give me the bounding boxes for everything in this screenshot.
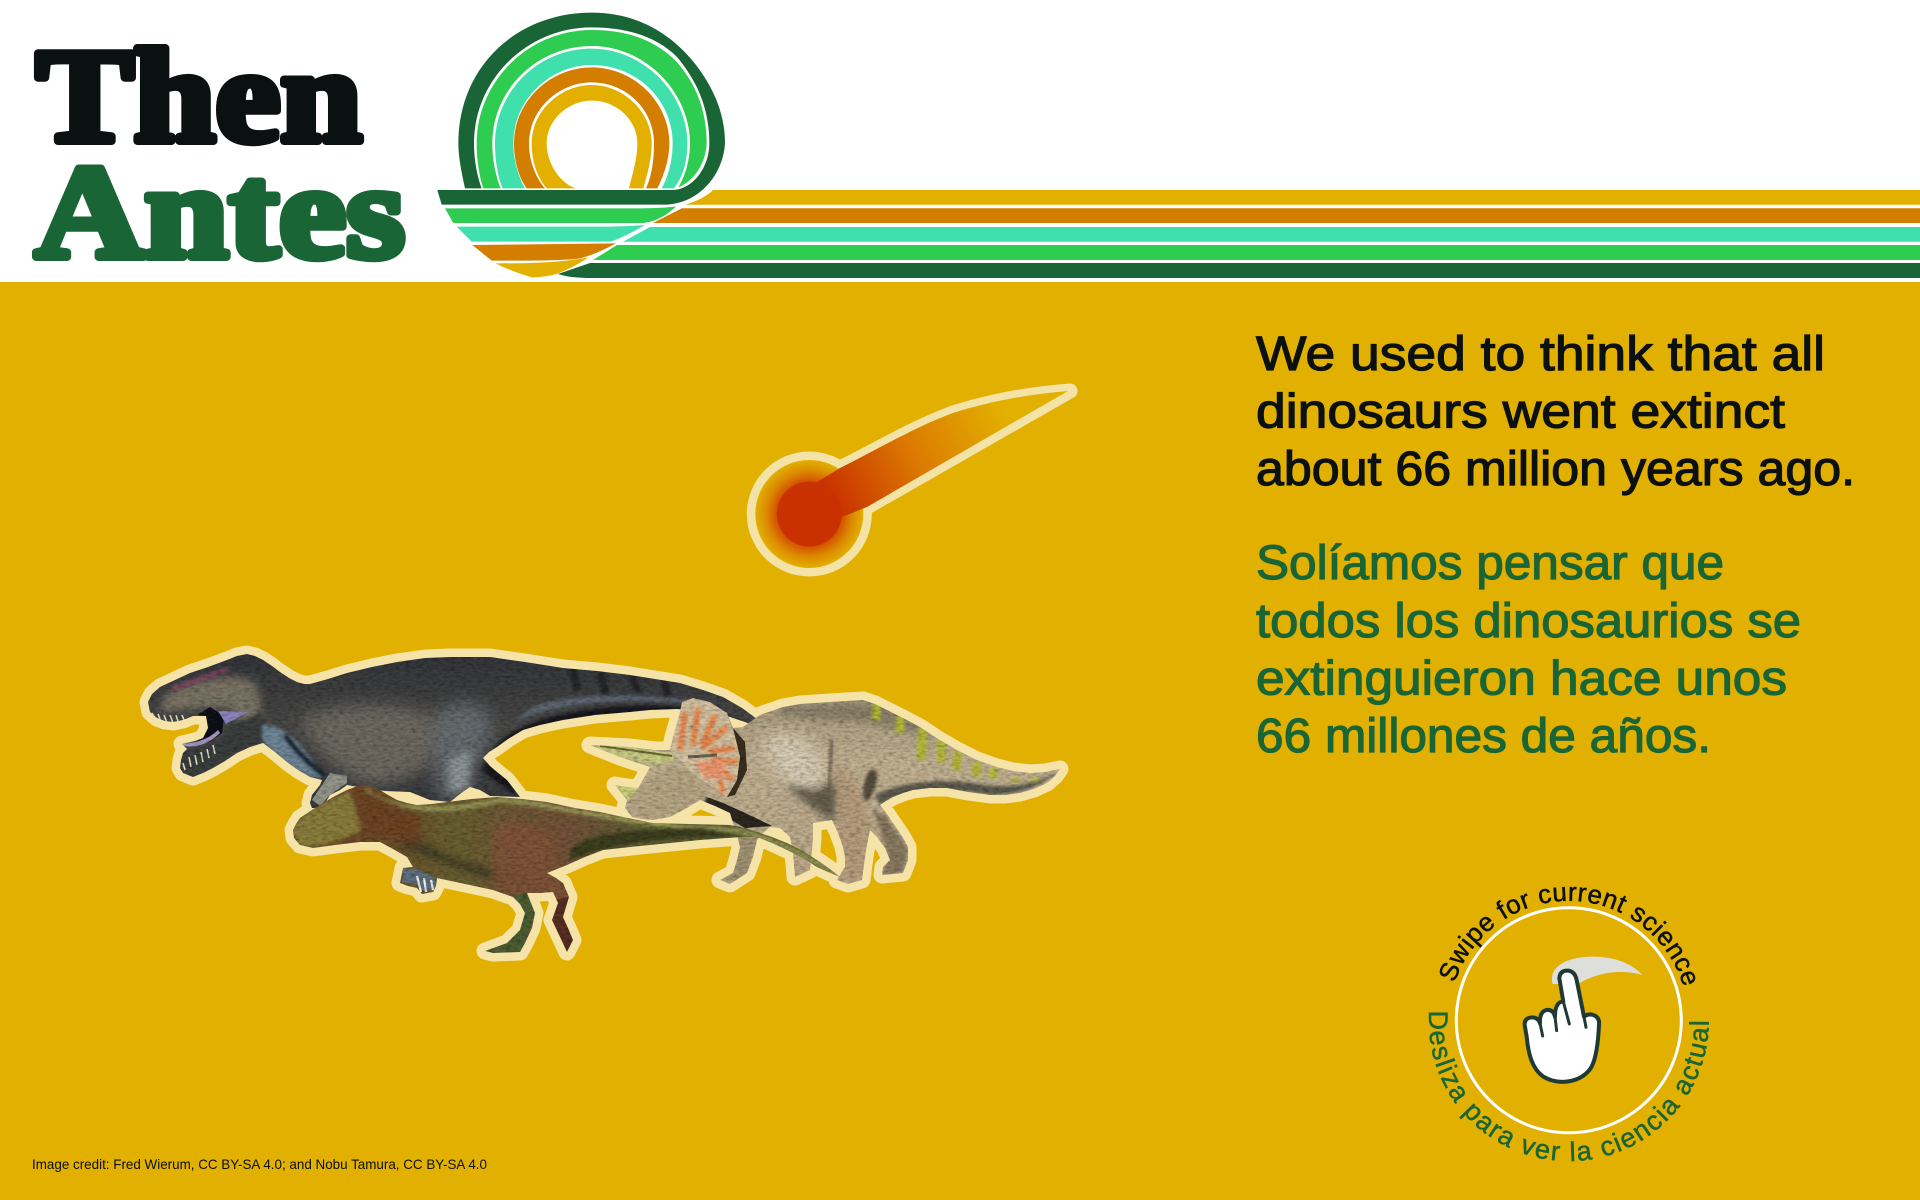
title: Then / Antes [35, 22, 405, 286]
swipe badge [1428, 886, 1710, 1162]
forward leg [485, 893, 535, 953]
title line: Antes: Antes [35, 138, 405, 286]
dinosaurs illustration [140, 640, 1065, 960]
tail blue-grey band [515, 696, 700, 722]
tail stripes [572, 668, 668, 696]
lower jaw [184, 712, 264, 762]
thigh [493, 823, 569, 917]
tail underside [570, 828, 740, 860]
under-neck dark folds [700, 795, 772, 828]
brow stripe [172, 669, 228, 689]
rainbow loop logo [437, 13, 725, 277]
knee highlight [448, 750, 472, 792]
band: green arch [477, 30, 707, 188]
dinosaur: acrocanthosaurus [285, 780, 845, 960]
horizontal rainbow stripes [558, 190, 1920, 278]
english line 1: We used to think that all [1256, 328, 1825, 381]
back stripes [876, 703, 1036, 782]
tail underside dark [480, 705, 770, 795]
torso sheen [300, 705, 441, 785]
front leg shade [722, 825, 760, 882]
header band [0, 0, 1920, 282]
dinosaur: tyrannosaurus [148, 654, 756, 808]
band: dark green outer [437, 13, 725, 205]
hand [402, 868, 436, 892]
thigh highlight [433, 703, 491, 800]
belly shade [785, 780, 840, 822]
nose horn [615, 785, 638, 800]
spanish line 4: 66 millones de años. [1256, 710, 1711, 763]
english text block [1256, 328, 1855, 496]
frill salmon patch [695, 760, 725, 778]
chest blue highlight [255, 725, 322, 778]
tongue: green [445, 207, 676, 223]
rear lower leg [552, 897, 573, 952]
curved label: english: Swipe for current science [1440, 886, 1696, 986]
brow horn [590, 745, 675, 765]
tongue: gold [496, 257, 588, 277]
head cheek [160, 677, 260, 735]
english line 3: about 66 million years ago. [1256, 443, 1855, 496]
far rear leg [873, 810, 908, 875]
meteor icon [747, 391, 1070, 576]
icon: swiping hand [1525, 957, 1642, 1082]
frill collar dark [727, 728, 747, 797]
head [627, 765, 707, 818]
tongue [182, 730, 220, 747]
band: gold arch [532, 85, 652, 188]
rear leg tone [832, 760, 870, 880]
frill [670, 698, 743, 797]
swipe trail [1552, 957, 1642, 984]
main gold panel [0, 282, 1920, 1200]
brow line [688, 755, 717, 757]
image credit: Image credit: Fred Wierum, CC BY-SA 4.0; and Nobu Tamura, CC BY-SA 4.0 [32, 1156, 487, 1172]
back dark dust [780, 703, 940, 738]
light flank [760, 733, 825, 800]
tongue: teal [457, 225, 645, 242]
badge circle [1456, 908, 1681, 1133]
english line 2: dinosaurs went extinct [1256, 386, 1785, 438]
claws [417, 876, 433, 892]
cream sticker outline [148, 654, 1060, 953]
tail underside [875, 771, 1058, 805]
finger creases [1540, 1002, 1586, 1036]
title line: Then: Then [36, 22, 362, 170]
spanish line 2: todos los dinosaurios se [1256, 595, 1801, 648]
mouth interior [185, 707, 224, 747]
belly shade [398, 840, 498, 882]
rear leg edge [829, 740, 832, 790]
forearm [312, 773, 347, 806]
back light stripe [365, 790, 840, 877]
frill orange rays [680, 708, 738, 793]
spanish line 1: Solíamos pensar que [1256, 537, 1724, 590]
spanish line 3: extinguieron hace unos [1256, 652, 1787, 706]
teeth [152, 713, 215, 770]
spanish text block [1256, 537, 1801, 763]
head [293, 792, 362, 846]
band: orange arch [514, 67, 669, 188]
dinosaur: triceratops [585, 695, 1065, 890]
curved label: spanish: Desliza para ver la ciencia actual [1428, 1012, 1710, 1162]
hand [1525, 971, 1599, 1082]
band: teal arch [495, 49, 687, 188]
neck brown [350, 786, 420, 845]
mouth cheek purple [218, 711, 248, 724]
tongue: orange [472, 243, 616, 261]
thigh shadow [863, 769, 877, 801]
